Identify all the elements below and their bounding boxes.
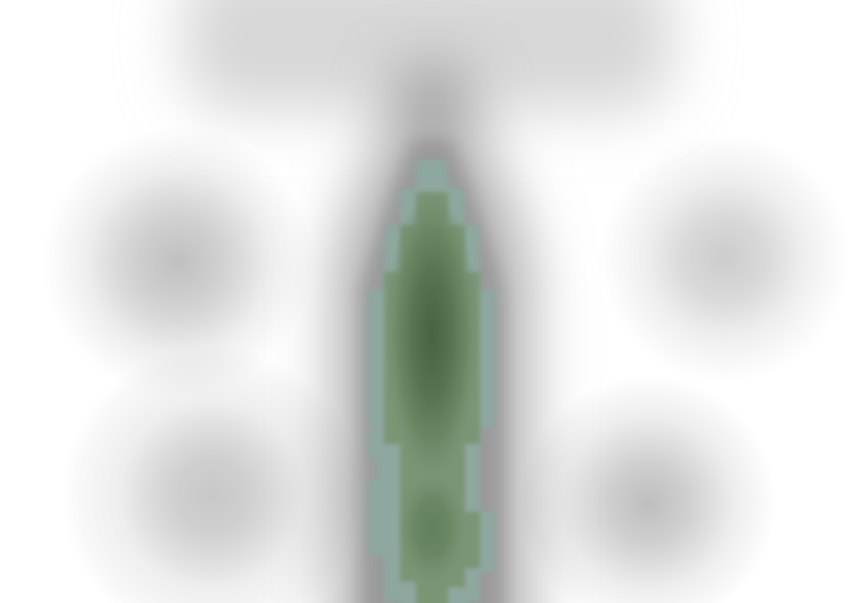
central column lower green core xyxy=(398,472,466,584)
central column teal edge xyxy=(368,160,496,603)
central column dark green core xyxy=(386,190,478,480)
central column green body xyxy=(384,192,480,603)
panel: lower right blurred circle xyxy=(520,375,776,603)
panel: upper right blurred circle xyxy=(600,133,850,383)
panel: upper left blurred circle xyxy=(43,127,313,397)
central column wide gray halo xyxy=(335,70,530,603)
chart: central tapered column xyxy=(335,70,530,603)
panel: lower left blurred circle xyxy=(62,345,362,603)
central column tight gray halo xyxy=(358,140,506,603)
heading: blurred title band xyxy=(183,0,673,112)
